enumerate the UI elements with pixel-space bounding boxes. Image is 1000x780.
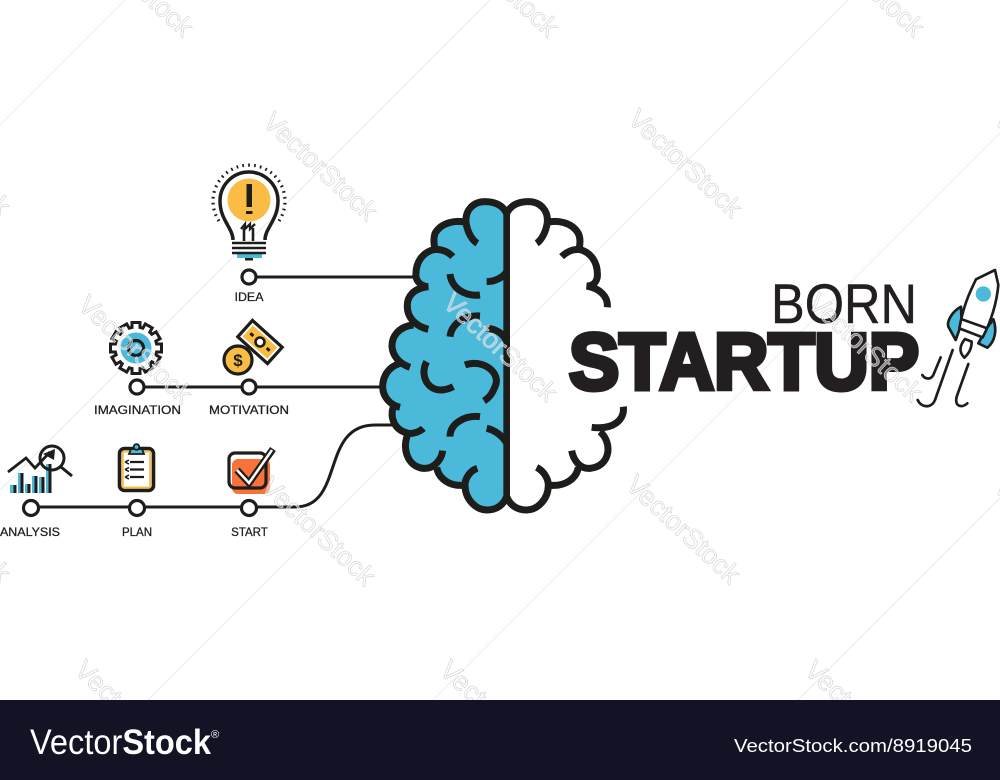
icon: money: $ — [233, 351, 243, 370]
watermarks: Vect — [799, 654, 858, 713]
watermarks: VectorStock — [620, 469, 746, 590]
watermarks: VectorStock — [257, 106, 383, 227]
left hemisphere outline — [383, 202, 507, 510]
node: start — [242, 500, 256, 516]
watermarks: VectorStock — [437, 287, 563, 408]
footer logo: VectorStock — [30, 723, 211, 762]
node: plan — [130, 500, 144, 516]
label: idea: IDEA — [234, 292, 264, 304]
registered mark: ® — [211, 729, 219, 741]
icon: gear — [109, 321, 163, 375]
label: motivation: MOTIVATION — [209, 405, 289, 417]
centre line — [497, 212, 517, 498]
icon: light bulb — [213, 165, 285, 260]
footer bar — [0, 700, 1000, 780]
node: motivation — [242, 380, 256, 394]
node: idea — [242, 270, 256, 284]
heading: born: BORN — [771, 272, 917, 335]
node: analysis — [24, 500, 38, 516]
label: plan: PLAN — [122, 527, 152, 539]
node: imagination — [130, 380, 144, 394]
icon: money — [224, 320, 282, 374]
watermarks: Vect — [69, 654, 128, 713]
watermarks: Vect — [434, 654, 493, 713]
icon: rocket — [918, 270, 998, 406]
icon: clipboard — [120, 444, 154, 490]
left inner folds — [424, 272, 507, 443]
label: imagination: IMAGINATION — [94, 405, 181, 417]
watermarks: VectorStock — [72, 289, 198, 410]
footer url: VectorStock.com/8919045 — [734, 736, 972, 756]
heading: startup: STARTUP — [569, 317, 919, 406]
watermarks: VectorStock — [255, 471, 381, 592]
icon: analysis chart — [8, 446, 72, 493]
label: analysis: ANALYSIS — [0, 527, 60, 539]
watermarks: VectorStock — [802, 287, 928, 408]
right hemisphere outline — [507, 202, 623, 510]
watermarks: VectorStock — [622, 103, 748, 224]
connector lines — [31, 277, 415, 507]
label: start: START — [231, 527, 268, 539]
left hemisphere fill — [383, 202, 507, 510]
icon: checkbox — [229, 449, 273, 494]
brain — [383, 202, 623, 510]
